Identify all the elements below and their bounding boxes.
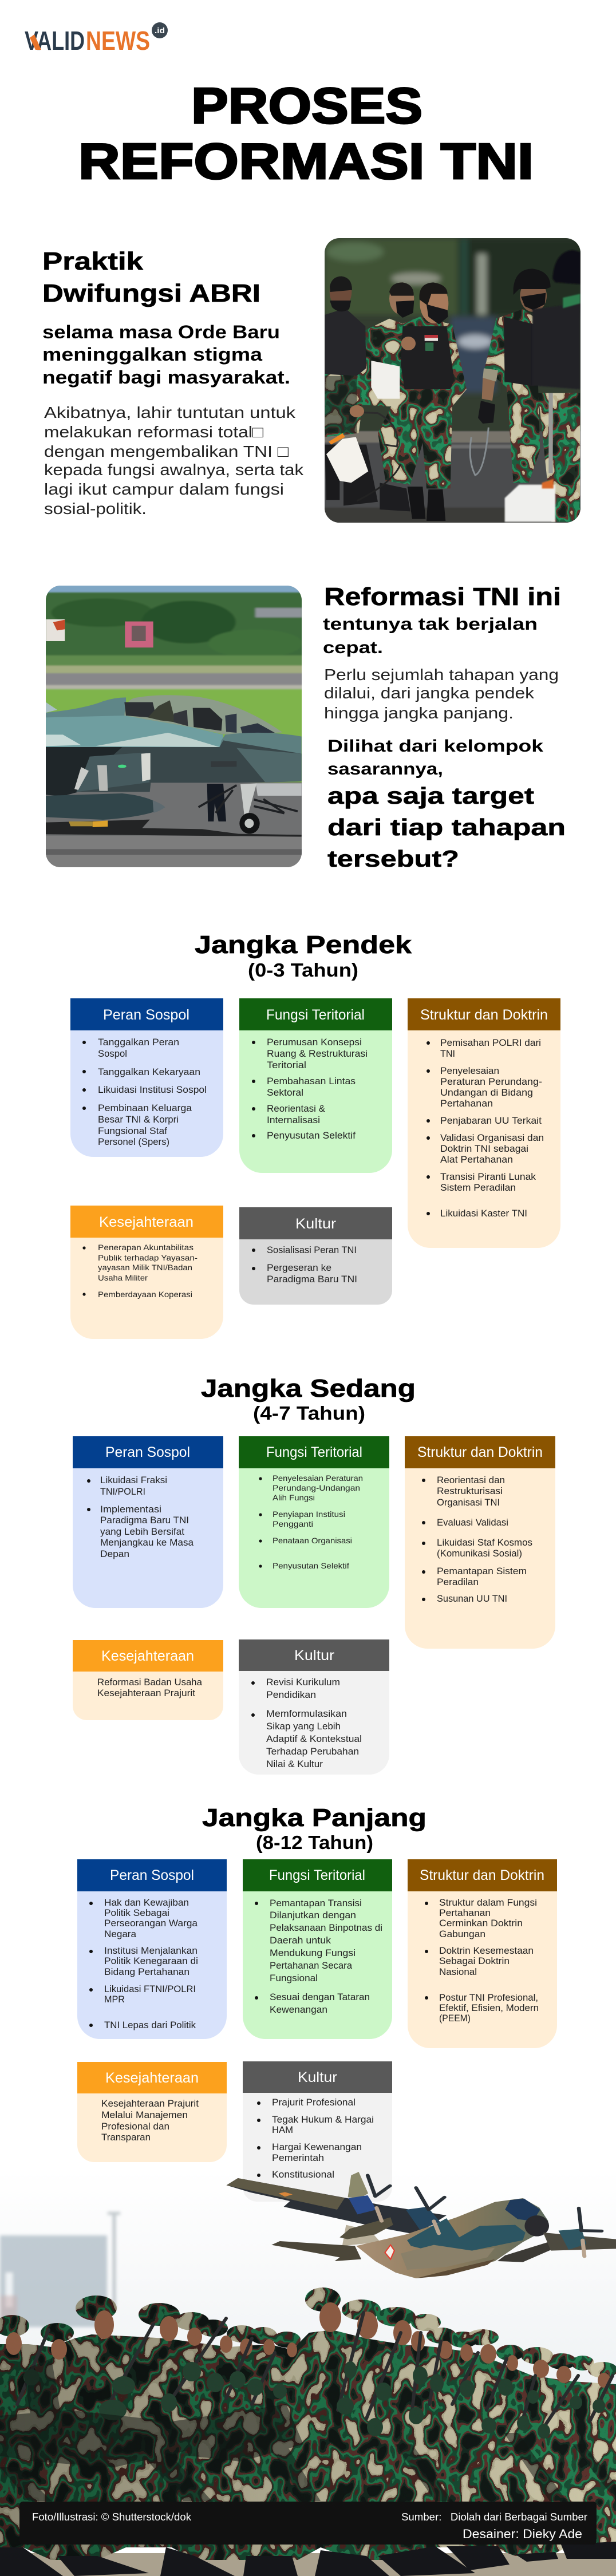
panel: Fungsi Teritorial, jangka sedang: Fungsi Teritorial bbox=[266, 1444, 362, 1460]
panel: Struktur dan Doktrin, jangka panjang: Nasional bbox=[439, 1967, 477, 1977]
panel: Struktur dan Doktrin, jangka pendek: Doktrin TNI sebagai bbox=[440, 1144, 528, 1154]
panel: Kultur, jangka panjang: HAM bbox=[272, 2125, 293, 2135]
footer bar: Sumber: Diolah dari Berbagai Sumber bbox=[401, 2511, 587, 2523]
panel: Peran Sospol, jangka pendek: Tanggalkan Kekaryaan bbox=[98, 1067, 200, 1077]
panel: Peran Sospol, jangka sedang: Likuidasi Fraksi bbox=[100, 1475, 167, 1485]
panel: Peran Sospol, jangka pendek: Peran Sospol bbox=[103, 1007, 189, 1023]
heading: Jangka Sedang: (4-7 Tahun) bbox=[253, 1402, 365, 1424]
text block: Reformasi TNI ini: apa saja target bbox=[327, 783, 534, 809]
text block: Praktik Dwifungsi ABRI: melakukan reformasi total□ bbox=[44, 423, 263, 441]
panel: Struktur dan Doktrin, jangka sedang: Likuidasi Staf Kosmos bbox=[437, 1538, 532, 1548]
footer bar bbox=[19, 2502, 597, 2545]
title: REFORMASI TNI bbox=[78, 133, 534, 189]
panel: Struktur dan Doktrin, jangka pendek: Transisi Piranti Lunak bbox=[440, 1172, 536, 1182]
panel: Fungsi Teritorial, jangka panjang: Pemantapan Transisi bbox=[270, 1898, 362, 1909]
panel: Fungsi Teritorial, jangka sedang: Penyiapan Institusi bbox=[273, 1510, 345, 1519]
logo: Validnews: VALID bbox=[25, 26, 85, 56]
text block: Reformasi TNI ini: dilalui, dari jangka pendek bbox=[324, 684, 535, 702]
panel: Kultur, jangka panjang: Hargai Kewenangan bbox=[272, 2142, 362, 2152]
panel: Fungsi Teritorial, jangka pendek: Teritorial bbox=[267, 1060, 306, 1070]
panel: Peran Sospol, jangka sedang: Paradigma Baru TNI bbox=[100, 1515, 189, 1526]
text block: Reformasi TNI ini: Perlu sejumlah tahapan yang bbox=[324, 666, 559, 683]
panel: Struktur dan Doktrin, jangka panjang: Postur TNI Profesional, bbox=[439, 1993, 538, 2003]
title: PROSES bbox=[191, 77, 422, 134]
panel: Peran Sospol, jangka panjang: TNI Lepas dari Politik bbox=[104, 2020, 196, 2030]
panel: Fungsi Teritorial, jangka panjang: Sesuai dengan Tataran bbox=[270, 1992, 370, 2002]
panel: Struktur dan Doktrin, jangka pendek: Validasi Organisasi dan bbox=[440, 1133, 544, 1143]
panel: Fungsi Teritorial, jangka pendek: Ruang & Restrukturasi bbox=[267, 1049, 368, 1059]
panel: Kultur, jangka sedang: Nilai & Kultur bbox=[266, 1759, 323, 1769]
text block: Praktik Dwifungsi ABRI: lagi ikut campur dalam fungsi bbox=[44, 480, 284, 498]
panel: Kultur, jangka panjang: Pemerintah bbox=[272, 2153, 324, 2163]
illustration: cargo plane bbox=[227, 2172, 616, 2278]
text block: Praktik Dwifungsi ABRI: meninggalkan stigma bbox=[42, 344, 262, 365]
panel: Fungsi Teritorial, jangka panjang: Dilanjutkan dengan bbox=[270, 1910, 356, 1921]
panel: Peran Sospol, jangka pendek: Pembinaan Keluarga bbox=[98, 1103, 192, 1113]
footer bar: Desainer: Dieky Ade bbox=[463, 2527, 582, 2541]
panel: Fungsi Teritorial, jangka sedang bbox=[239, 1436, 389, 1608]
panel: Kultur, jangka panjang: Konstitusional bbox=[272, 2170, 334, 2180]
panel: Kesejahteraan, jangka sedang bbox=[73, 1640, 223, 1720]
panel: Fungsi Teritorial, jangka panjang: Fungsi Teritorial bbox=[269, 1867, 365, 1883]
panel: Kesejahteraan, jangka panjang: Kesejahteraan bbox=[105, 2070, 199, 2086]
panel: Fungsi Teritorial, jangka sedang: Pengganti bbox=[273, 1519, 313, 1528]
panel: Peran Sospol, jangka panjang: Politik Sebagai bbox=[104, 1908, 169, 1918]
text block: Reformasi TNI ini: tersebut? bbox=[327, 846, 459, 872]
panel: Kesejahteraan, jangka panjang bbox=[77, 2062, 227, 2162]
panel: Kultur, jangka sedang: Sikap yang Lebih bbox=[266, 1721, 341, 1732]
panel: Kesejahteraan, jangka sedang: Kesejahteraan Prajurit bbox=[97, 1688, 195, 1698]
panel: Struktur dan Doktrin, jangka pendek: Penyelesaian bbox=[440, 1066, 499, 1076]
panel: Kesejahteraan, jangka pendek: Penerapan Akuntabilitas bbox=[98, 1243, 194, 1252]
panel: Struktur dan Doktrin, jangka panjang: Cerminkan Doktrin bbox=[439, 1918, 523, 1929]
panel: Kultur, jangka pendek: Kultur bbox=[295, 1216, 336, 1232]
panel: Kultur, jangka sedang: Kultur bbox=[294, 1647, 334, 1664]
panel: Kesejahteraan, jangka panjang: Melalui Manajemen bbox=[101, 2110, 188, 2120]
text block: Reformasi TNI ini: Dilihat dari kelompok bbox=[327, 737, 543, 756]
panel: Peran Sospol, jangka panjang: Hak dan Kewajiban bbox=[104, 1898, 189, 1908]
panel: Fungsi Teritorial, jangka panjang bbox=[243, 1859, 392, 2039]
panel: Kultur, jangka pendek: Sosialisasi Peran TNI bbox=[267, 1245, 357, 1255]
panel: Kesejahteraan, jangka pendek: Publik terhadap Yayasan- bbox=[98, 1253, 198, 1262]
panel: Fungsi Teritorial, jangka sedang: Alih Fungsi bbox=[273, 1493, 315, 1502]
panel: Struktur dan Doktrin, jangka panjang: (PEEM) bbox=[439, 2013, 471, 2024]
panel: Peran Sospol, jangka sedang: Peran Sospol bbox=[105, 1444, 190, 1460]
heading: Jangka Sedang: Jangka Sedang bbox=[201, 1374, 416, 1402]
panel: Kesejahteraan, jangka pendek: Usaha Militer bbox=[98, 1273, 148, 1282]
panel: Struktur dan Doktrin, jangka sedang: Pemantapan Sistem bbox=[437, 1566, 527, 1577]
heading: Jangka Panjang: (8-12 Tahun) bbox=[256, 1832, 373, 1853]
heading: Jangka Panjang: Jangka Panjang bbox=[202, 1804, 427, 1832]
panel: Struktur dan Doktrin, jangka pendek: Pertahanan bbox=[440, 1099, 493, 1109]
panel: Fungsi Teritorial, jangka sedang: Perundang-Undangan bbox=[273, 1483, 360, 1492]
title bbox=[78, 77, 534, 189]
panel: Kultur, jangka panjang bbox=[243, 2061, 392, 2202]
panel: Fungsi Teritorial, jangka pendek: Fungsi Teritorial bbox=[266, 1007, 365, 1023]
panel: Struktur dan Doktrin, jangka pendek: Likuidasi Kaster TNI bbox=[440, 1208, 527, 1219]
text block: Praktik Dwifungsi ABRI bbox=[42, 247, 304, 517]
heading: Jangka Sedang bbox=[201, 1374, 416, 1424]
panel: Kesejahteraan, jangka panjang: Kesejahteraan Prajurit bbox=[101, 2099, 199, 2109]
panel: Kultur, jangka sedang bbox=[239, 1639, 389, 1775]
soldiers' faces bbox=[6, 2302, 610, 2388]
panel: Peran Sospol, jangka panjang: Likuidasi FTNI/POLRI bbox=[104, 1984, 196, 1994]
panel: Peran Sospol, jangka panjang bbox=[77, 1859, 227, 2039]
panel: Peran Sospol, jangka panjang: Bidang Pertahanan bbox=[104, 1967, 189, 1977]
panel: Kultur, jangka sedang: Revisi Kurikulum bbox=[266, 1677, 340, 1688]
dark waist band and shadows bbox=[0, 2358, 616, 2501]
panel: Struktur dan Doktrin, jangka pendek: TNI bbox=[440, 1049, 455, 1059]
panel: Struktur dan Doktrin, jangka sedang: (Komunikasi Sosial) bbox=[437, 1548, 522, 1559]
panel: Kesejahteraan, jangka panjang: Transparan bbox=[101, 2132, 151, 2143]
background photo: sky and building bbox=[0, 2170, 616, 2399]
text block: Reformasi TNI ini bbox=[323, 583, 566, 872]
panel: Struktur dan Doktrin, jangka sedang: Reorientasi dan bbox=[437, 1475, 505, 1485]
footer bar: Foto/Illustrasi: © Shutterstock/dok bbox=[32, 2511, 192, 2523]
panel: Peran Sospol, jangka sedang: Depan bbox=[100, 1549, 129, 1559]
heading: Jangka Panjang bbox=[202, 1804, 427, 1853]
panel: Kesejahteraan, jangka sedang: Reformasi Badan Usaha bbox=[97, 1677, 203, 1688]
text block: Praktik Dwifungsi ABRI: negatif bagi masyarakat. bbox=[42, 367, 290, 388]
panel: Struktur dan Doktrin, jangka panjang: Gabungan bbox=[439, 1929, 485, 1939]
panel: Peran Sospol, jangka sedang: Implementasi bbox=[100, 1504, 161, 1515]
panel: Fungsi Teritorial, jangka panjang: Mendukung Fungsi bbox=[270, 1948, 356, 1958]
panel: Struktur dan Doktrin, jangka sedang: Restrukturisasi bbox=[437, 1486, 503, 1496]
panel: Fungsi Teritorial, jangka pendek: Perumusan Konsepsi bbox=[267, 1037, 362, 1048]
panel: Peran Sospol, jangka pendek: Fungsional Staf bbox=[98, 1126, 167, 1136]
panel: Fungsi Teritorial, jangka pendek: Internalisasi bbox=[267, 1115, 320, 1125]
text block: Reformasi TNI ini: Reformasi TNI ini bbox=[324, 583, 561, 611]
text block: Praktik Dwifungsi ABRI: dengan mengembalikan TNI □ bbox=[44, 442, 289, 460]
text block: Praktik Dwifungsi ABRI: Dwifungsi ABRI bbox=[42, 279, 260, 307]
panel: Kultur, jangka sedang: Terhadap Perubahan bbox=[266, 1747, 359, 1757]
panel: Struktur dan Doktrin, jangka pendek: Struktur dan Doktrin bbox=[420, 1007, 548, 1023]
panel: Kesejahteraan, jangka sedang: Kesejahteraan bbox=[101, 1648, 194, 1664]
panel: Kultur, jangka pendek bbox=[239, 1207, 392, 1305]
panel: Peran Sospol, jangka sedang bbox=[73, 1436, 223, 1608]
panel: Fungsi Teritorial, jangka pendek: Reorientasi & bbox=[267, 1104, 325, 1114]
rifles bbox=[17, 2313, 613, 2427]
photo: fighter jet on runway bbox=[40, 584, 310, 870]
panel: Struktur dan Doktrin, jangka pendek: Penjabaran UU Terkait bbox=[440, 1116, 542, 1126]
panel: Peran Sospol, jangka pendek: Besar TNI & Korpri bbox=[98, 1115, 179, 1125]
text block: Praktik Dwifungsi ABRI: selama masa Orde Baru bbox=[42, 322, 280, 342]
text block: Reformasi TNI ini: cepat. bbox=[323, 638, 383, 657]
panel: Struktur dan Doktrin, jangka panjang bbox=[408, 1859, 557, 2048]
panel: Struktur dan Doktrin, jangka sedang: Peradilan bbox=[437, 1577, 479, 1587]
panel: Peran Sospol, jangka sedang: yang Lebih Bersifat bbox=[100, 1527, 184, 1537]
panel: Peran Sospol, jangka panjang: Peran Sospol bbox=[110, 1867, 194, 1883]
panel: Peran Sospol, jangka panjang: Perseorangan Warga bbox=[104, 1918, 198, 1929]
panel: Struktur dan Doktrin, jangka pendek: Peraturan Perundang- bbox=[440, 1077, 542, 1087]
heading: Jangka Pendek: Jangka Pendek bbox=[195, 931, 412, 959]
panel: Struktur dan Doktrin, jangka panjang: Sebagai Doktrin bbox=[439, 1956, 510, 1966]
panel: Peran Sospol, jangka pendek: Sospol bbox=[98, 1049, 127, 1059]
panel: Kultur, jangka panjang: Tegak Hukum & Hargai bbox=[272, 2115, 374, 2125]
text block: Reformasi TNI ini: sasarannya, bbox=[327, 760, 443, 779]
panel: Kesejahteraan, jangka panjang: Profesional dan bbox=[101, 2121, 169, 2132]
panel: Kultur, jangka pendek: Paradigma Baru TNI bbox=[267, 1274, 357, 1285]
panel: Kultur, jangka sedang: Adaptif & Kontekstual bbox=[266, 1734, 362, 1744]
panel: Fungsi Teritorial, jangka sedang: Penataan Organisasi bbox=[273, 1536, 352, 1545]
text block: Praktik Dwifungsi ABRI: Akibatnya, lahir tuntutan untuk bbox=[44, 404, 296, 421]
text block: Praktik Dwifungsi ABRI: kepada fungsi awalnya, serta tak bbox=[44, 461, 304, 479]
panel: Peran Sospol, jangka pendek: Likuidasi Institusi Sospol bbox=[98, 1085, 207, 1095]
panel: Kultur, jangka sedang: Pendidikan bbox=[266, 1690, 316, 1700]
heading: Jangka Pendek bbox=[195, 931, 412, 981]
panel: Kesejahteraan, jangka pendek: Pemberdayaan Koperasi bbox=[98, 1290, 192, 1299]
panel: Fungsi Teritorial, jangka sedang: Penyelesaian Peraturan bbox=[273, 1473, 363, 1483]
text block: Reformasi TNI ini: tentunya tak berjalan bbox=[323, 615, 538, 634]
panel: Fungsi Teritorial, jangka panjang: Pelaksanaan Binpotnas di bbox=[270, 1923, 382, 1933]
panel: Struktur dan Doktrin, jangka sedang: Organisasi TNI bbox=[437, 1498, 500, 1508]
panel: Peran Sospol, jangka panjang: Institusi Menjalankan bbox=[104, 1946, 198, 1956]
panel: Peran Sospol, jangka panjang: MPR bbox=[104, 1994, 125, 2005]
panel: Struktur dan Doktrin, jangka pendek: Pemisahan POLRI dari bbox=[440, 1038, 541, 1048]
panel: Struktur dan Doktrin, jangka panjang: Struktur dalam Fungsi bbox=[439, 1898, 537, 1908]
boots bbox=[0, 2542, 616, 2576]
panel: Struktur dan Doktrin, jangka pendek: Alat Pertahanan bbox=[440, 1155, 513, 1165]
panel: Struktur dan Doktrin, jangka sedang: Susunan UU TNI bbox=[437, 1594, 507, 1604]
panel: Peran Sospol, jangka panjang: Negara bbox=[104, 1929, 137, 1939]
panel: Fungsi Teritorial, jangka panjang: Daerah untuk bbox=[270, 1935, 331, 1946]
panel: Kesejahteraan, jangka pendek: Kesejahteraan bbox=[99, 1214, 194, 1230]
panel: Struktur dan Doktrin, jangka sedang: Evaluasi Validasi bbox=[437, 1518, 508, 1528]
panel: Kultur, jangka pendek: Pergeseran ke bbox=[267, 1263, 331, 1273]
panel: Peran Sospol, jangka panjang: Politik Kenegaraan di bbox=[104, 1956, 198, 1966]
heading: Jangka Pendek: (0-3 Tahun) bbox=[248, 959, 358, 981]
panel: Struktur dan Doktrin, jangka panjang: Struktur dan Doktrin bbox=[420, 1867, 544, 1883]
panel: Peran Sospol, jangka sedang: TNI/POLRI bbox=[100, 1487, 145, 1497]
panel: Peran Sospol, jangka pendek: Tanggalkan Peran bbox=[98, 1037, 179, 1048]
gloves bbox=[23, 2361, 605, 2439]
panel: Struktur dan Doktrin, jangka pendek: Sistem Peradilan bbox=[440, 1183, 516, 1193]
text block: Praktik Dwifungsi ABRI: sosial-politik. bbox=[44, 500, 147, 517]
panel: Struktur dan Doktrin, jangka panjang: Doktrin Kesemestaan bbox=[439, 1946, 534, 1956]
panel: Struktur dan Doktrin, jangka panjang: Efektif, Efisien, Modern bbox=[439, 2003, 539, 2013]
logo: Validnews bbox=[25, 22, 168, 56]
text block: Praktik Dwifungsi ABRI: Praktik bbox=[42, 247, 144, 275]
panel: Fungsi Teritorial, jangka pendek: Penyusutan Selektif bbox=[267, 1131, 356, 1141]
panel: Fungsi Teritorial, jangka panjang: Pertahanan Secara bbox=[270, 1961, 353, 1971]
panel: Kultur, jangka panjang: Kultur bbox=[298, 2069, 337, 2085]
panel: Kesejahteraan, jangka pendek bbox=[70, 1206, 223, 1339]
panel: Kultur, jangka panjang: Prajurit Profesional bbox=[272, 2097, 356, 2108]
panel: Struktur dan Doktrin, jangka pendek bbox=[408, 998, 560, 1248]
photo: soldiers walking bbox=[321, 235, 584, 527]
panel: Fungsi Teritorial, jangka panjang: Kewenangan bbox=[270, 2005, 327, 2015]
logo: Validnews: .id bbox=[155, 26, 165, 35]
panel: Fungsi Teritorial, jangka pendek: Sektoral bbox=[267, 1088, 303, 1098]
panel: Kultur, jangka sedang: Memformulasikan bbox=[266, 1709, 347, 1719]
panel: Peran Sospol, jangka pendek: Personel (Spers) bbox=[98, 1137, 169, 1147]
panel: Kesejahteraan, jangka pendek: yayasan Milik TNI/Badan bbox=[98, 1263, 192, 1272]
panel: Fungsi Teritorial, jangka sedang: Penyusutan Selektif bbox=[273, 1561, 349, 1570]
panel: Fungsi Teritorial, jangka pendek: Pembahasan Lintas bbox=[267, 1076, 356, 1086]
panel: Struktur dan Doktrin, jangka sedang bbox=[405, 1436, 555, 1649]
panel: Fungsi Teritorial, jangka pendek bbox=[239, 998, 392, 1173]
panel: Peran Sospol, jangka pendek bbox=[70, 998, 223, 1157]
text block: Reformasi TNI ini: hingga jangka panjang. bbox=[324, 704, 514, 722]
panel: Fungsi Teritorial, jangka panjang: Fungsional bbox=[270, 1973, 318, 1984]
panel: Struktur dan Doktrin, jangka pendek: Undangan di Bidang bbox=[440, 1088, 533, 1098]
panel: Struktur dan Doktrin, jangka sedang: Struktur dan Doktrin bbox=[417, 1444, 543, 1460]
photo: marching soldiers bbox=[0, 2281, 616, 2576]
text block: Reformasi TNI ini: dari tiap tahapan bbox=[327, 814, 566, 840]
panel: Peran Sospol, jangka sedang: Menjangkau ke Masa bbox=[100, 1538, 194, 1548]
panel: Struktur dan Doktrin, jangka panjang: Pertahanan bbox=[439, 1908, 491, 1918]
logo: Validnews: NEWS bbox=[86, 26, 150, 56]
